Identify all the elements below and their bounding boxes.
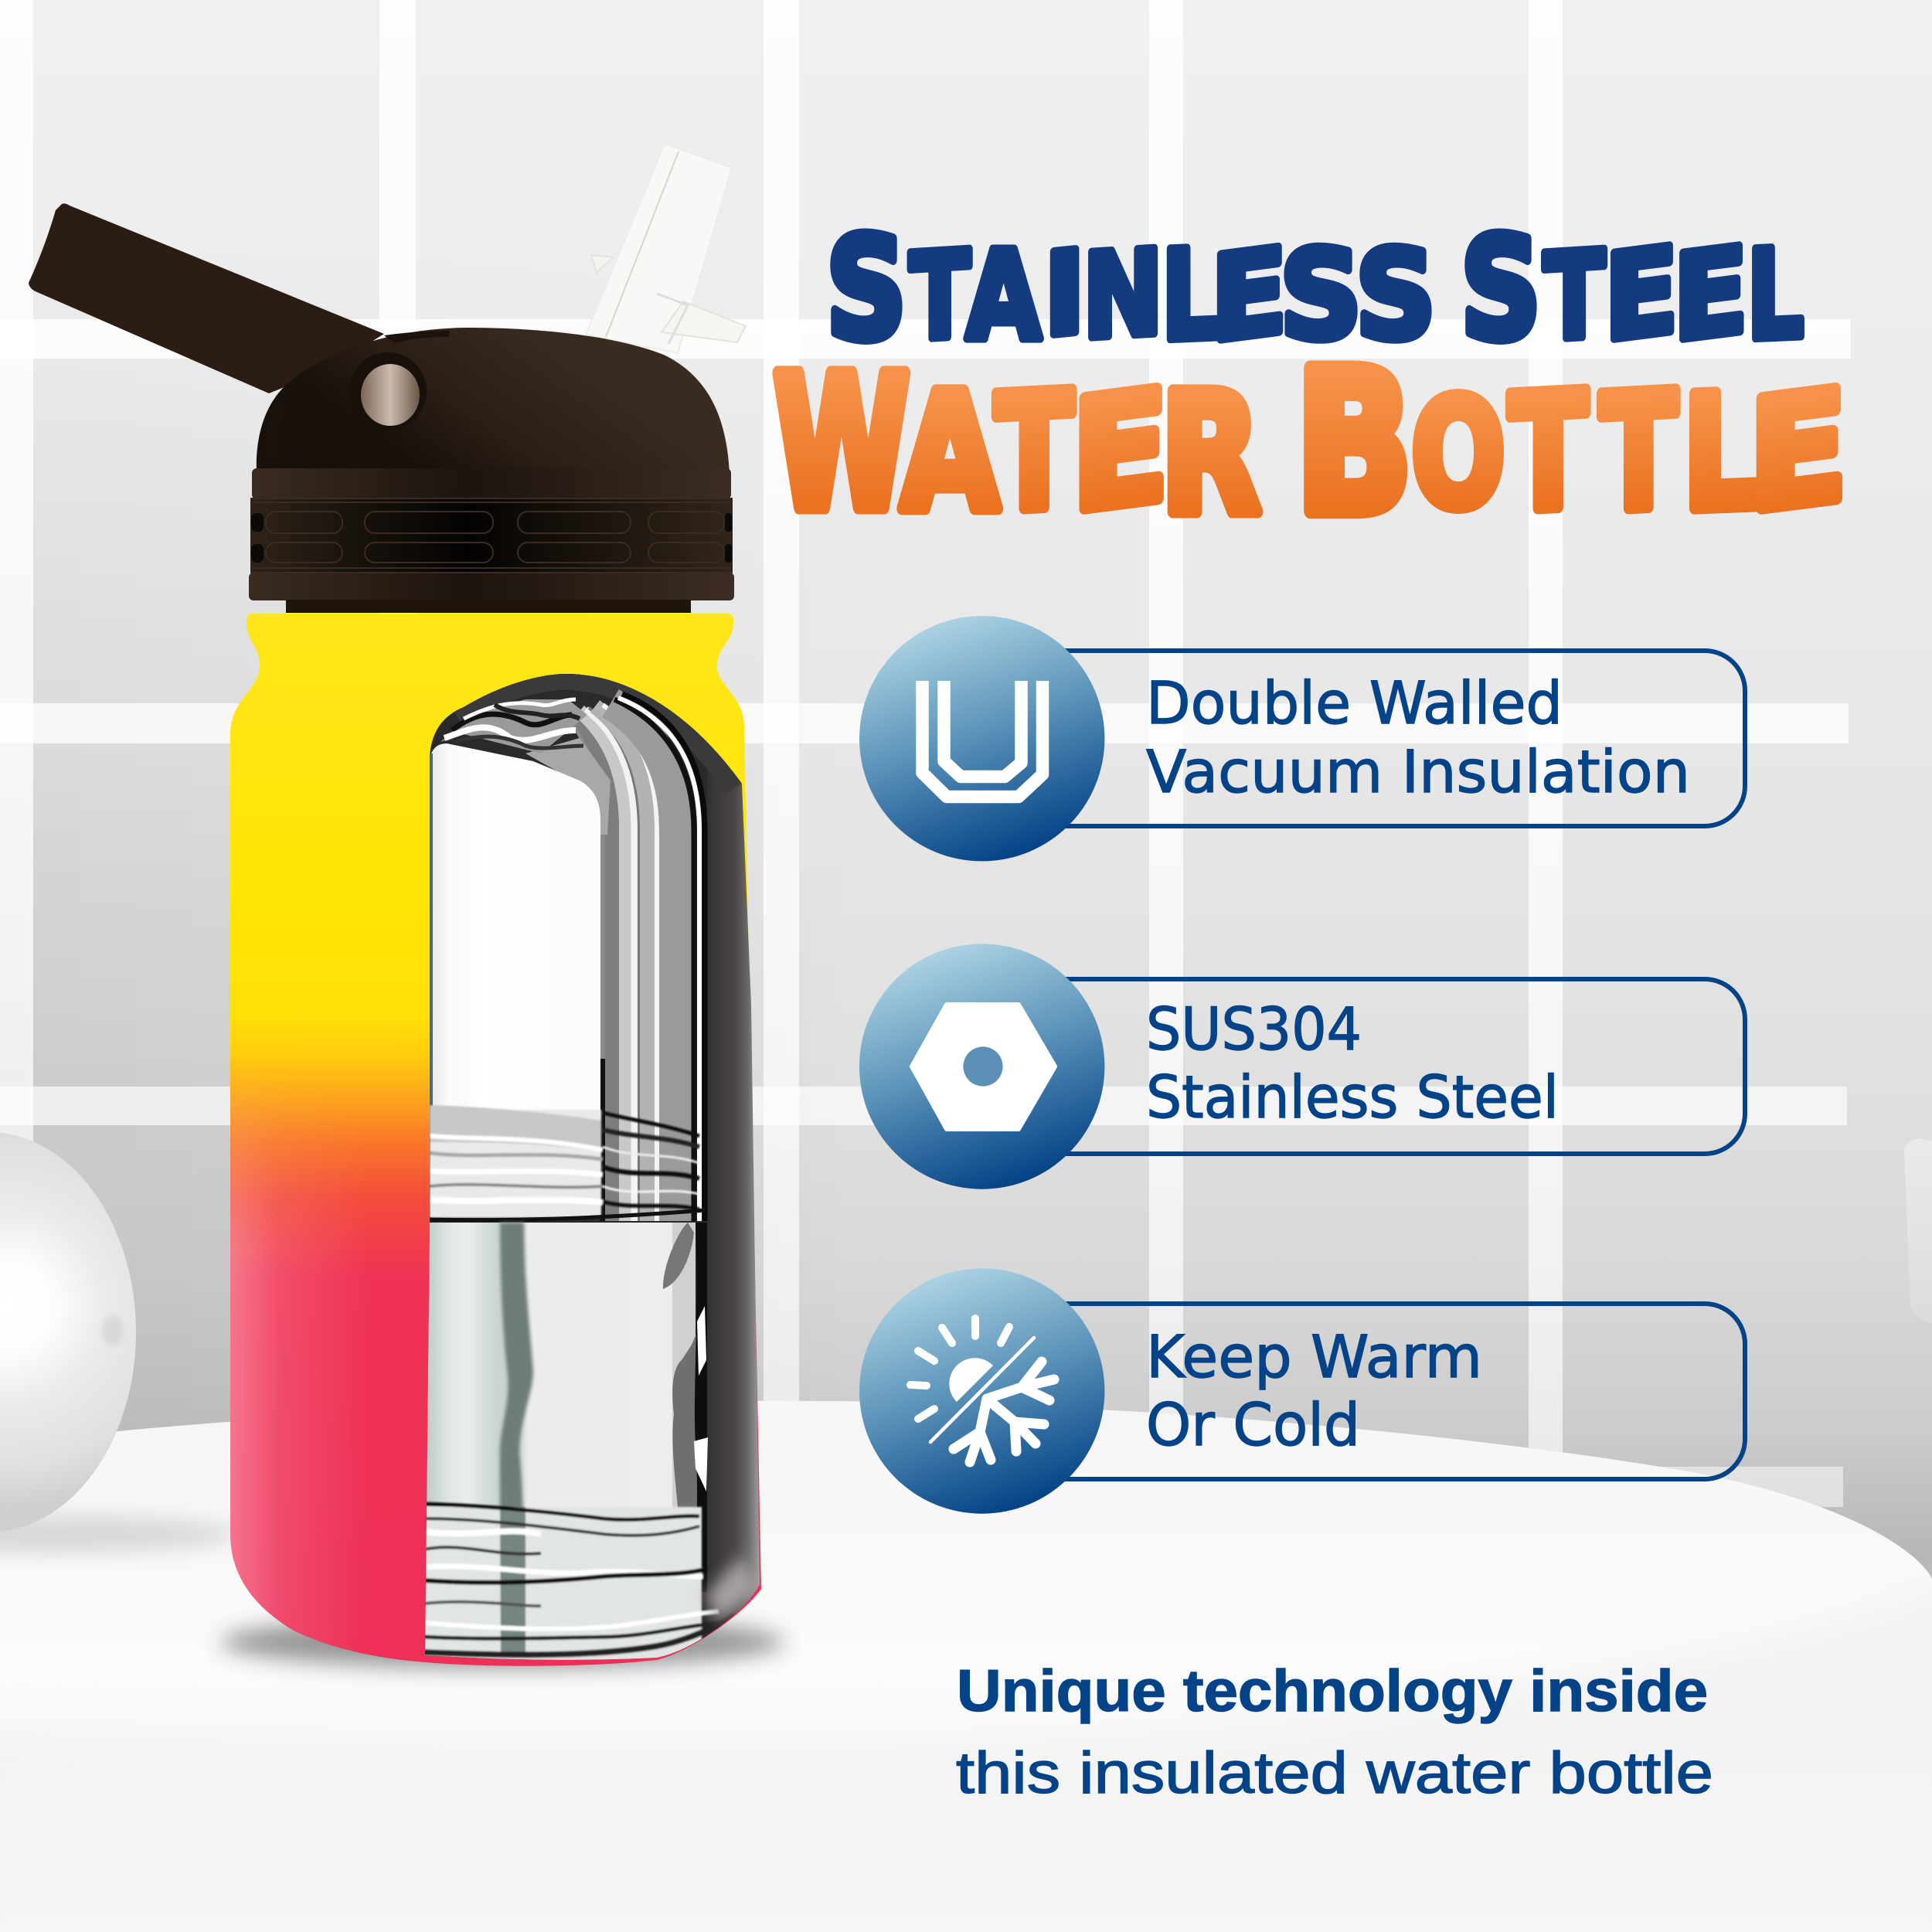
title: Stainless Steel: I: [1043, 225, 1086, 362]
feature outline box: [1005, 979, 1745, 1154]
title: Stainless Steel: [826, 207, 1804, 371]
title: Stainless Steel: S: [826, 207, 906, 371]
title: Water Bottle: L: [1683, 361, 1759, 546]
icon: sun and snowflake: [910, 1318, 1054, 1462]
lid bands: [249, 468, 734, 613]
title: Stainless Steel: E: [1211, 223, 1287, 369]
water fill: [423, 1210, 708, 1654]
title: Water Bottle: T: [1509, 359, 1587, 547]
badge circle: [859, 1268, 1104, 1514]
feature text: [1146, 668, 1690, 806]
background: white round table: [0, 1401, 1932, 1932]
title: Stainless Steel: S: [1461, 207, 1541, 371]
icon: hex nut: [912, 1005, 1055, 1129]
cutaway: double wall chrome interior: [417, 665, 773, 1669]
feature outline box: [1005, 651, 1745, 826]
title: Water Bottle: B: [1296, 331, 1412, 557]
outer wall arc: [456, 680, 734, 788]
title: Stainless Steel: S: [1355, 224, 1436, 367]
title: Water Bottle: [774, 331, 1847, 557]
title: Water Bottle: T: [995, 359, 1073, 547]
feature: keep warm or cold: [859, 1268, 1745, 1514]
title: Water Bottle: A: [901, 359, 998, 547]
bottle body gradient yellow to pink: [224, 611, 765, 1669]
bottle shadow: [220, 1616, 784, 1668]
lid rivet: [349, 352, 427, 430]
feature outline box: [1005, 1304, 1745, 1479]
feature text: Vacuum Insulation: [1146, 737, 1690, 806]
title: Water Bottle: R: [1161, 359, 1260, 551]
title: Stainless Steel: S: [1280, 225, 1362, 367]
title: Stainless Steel: E: [1673, 221, 1748, 368]
bottom right wedge: [706, 1556, 761, 1622]
base ridges: [423, 1504, 734, 1662]
title: Water Bottle: W: [774, 336, 910, 550]
title: Stainless Steel: T: [1544, 226, 1605, 368]
background: cup at right edge: [1904, 1139, 1932, 1323]
feature: SUS304 stainless steel: [859, 944, 1745, 1189]
feature text: Or Cold: [1146, 1390, 1360, 1459]
feature text: [1146, 995, 1559, 1131]
water refracted band: [500, 1223, 533, 1654]
title: Stainless Steel: L: [1162, 223, 1220, 369]
lid dome: [257, 328, 730, 474]
feature text: Stainless Steel: [1146, 1063, 1559, 1131]
title: Water Bottle: E: [1072, 356, 1168, 546]
lid handle: [29, 203, 384, 393]
straw: [586, 144, 746, 353]
background: pearl sphere: [0, 1132, 240, 1553]
feature text: SUS304: [1146, 995, 1362, 1063]
tagline: Unique technology inside: [957, 1658, 1708, 1724]
tagline: this insulated water bottle: [956, 1740, 1713, 1806]
ripple zone above water: [430, 1105, 699, 1218]
title: Stainless Steel: N: [1083, 224, 1163, 366]
right ripple blob: [663, 1223, 694, 1289]
title: Stainless Steel: T: [910, 226, 970, 368]
title: Water Bottle: E: [1749, 358, 1847, 546]
upper white reflection: [430, 743, 600, 1117]
feature text: [1146, 1322, 1482, 1459]
curved wall stripes: [568, 694, 705, 1221]
title: Water Bottle: O: [1411, 368, 1505, 542]
soft fill between reflection and stripes: [526, 738, 611, 835]
badge circle: [859, 944, 1104, 1189]
tagline: [956, 1658, 1713, 1806]
title: Water Bottle: T: [1600, 358, 1677, 547]
title: Stainless Steel: E: [1604, 220, 1679, 368]
title: Stainless Steel: A: [966, 224, 1041, 368]
title: Stainless Steel: L: [1747, 222, 1804, 368]
top crumpled reflections: [440, 699, 587, 753]
feature text: Double Walled: [1146, 668, 1563, 737]
icon: double wall U: [923, 681, 1043, 797]
feature text: Keep Warm: [1146, 1322, 1482, 1391]
feature: double walled vacuum insulation: [859, 616, 1745, 861]
badge circle: [859, 616, 1104, 861]
bottle: [29, 144, 784, 1669]
